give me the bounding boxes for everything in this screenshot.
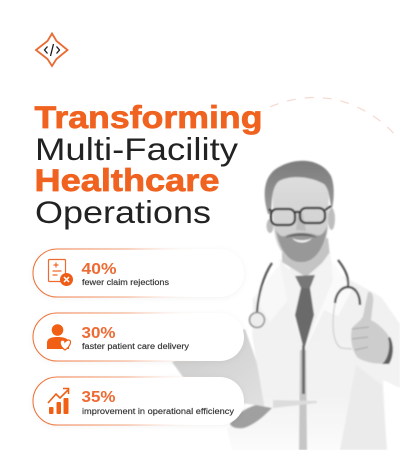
stat card 1 [33,249,244,297]
head: nose shade [296,212,306,231]
head: beard [276,226,327,262]
laptop base [273,400,317,408]
title: Healthcare [34,162,220,198]
head: hair [265,161,334,214]
shirt cuff [382,337,393,364]
label: faster patient care delivery [82,342,189,351]
icon: patient care [47,324,71,350]
label: fewer claim rejections [82,278,169,287]
holding hand [230,405,272,428]
laptop lid [172,329,273,408]
coat placket shadow [302,345,305,394]
label: improvement in operational efficiency [82,407,234,416]
necktie [295,288,314,350]
coat body [227,262,400,450]
title [34,99,262,230]
stat: 35%: 35% [82,389,116,406]
glasses [269,206,331,225]
hand: finger creases [352,327,369,350]
stat card 2 [33,313,244,361]
head: mustache [285,234,317,238]
icon: claim rejected [48,260,73,286]
decorative dashed arc [270,98,396,136]
coat lapel shade [340,365,387,450]
stat: 40%: 40% [82,261,117,278]
title: Multi-Facility [35,131,238,167]
coat shading [299,350,307,450]
shirt collar [279,252,333,345]
stat: 30%: 30% [82,325,116,342]
head: smile [292,238,312,242]
title: Transforming [34,99,262,135]
head: face [272,172,329,262]
neck [282,238,330,277]
coat lapel left [254,264,303,348]
title: Operations [35,194,211,230]
stethoscope [257,260,360,349]
coat lapel right [305,258,352,350]
stethoscope chestpiece [250,312,264,328]
stat card 3 [33,377,244,425]
photo: doctor [172,161,400,450]
necktie knot [295,275,315,288]
thumbs up hand [351,292,391,364]
logo icon: code diamond [36,34,68,66]
head: ears [266,208,335,233]
icon: growth chart [48,388,68,414]
